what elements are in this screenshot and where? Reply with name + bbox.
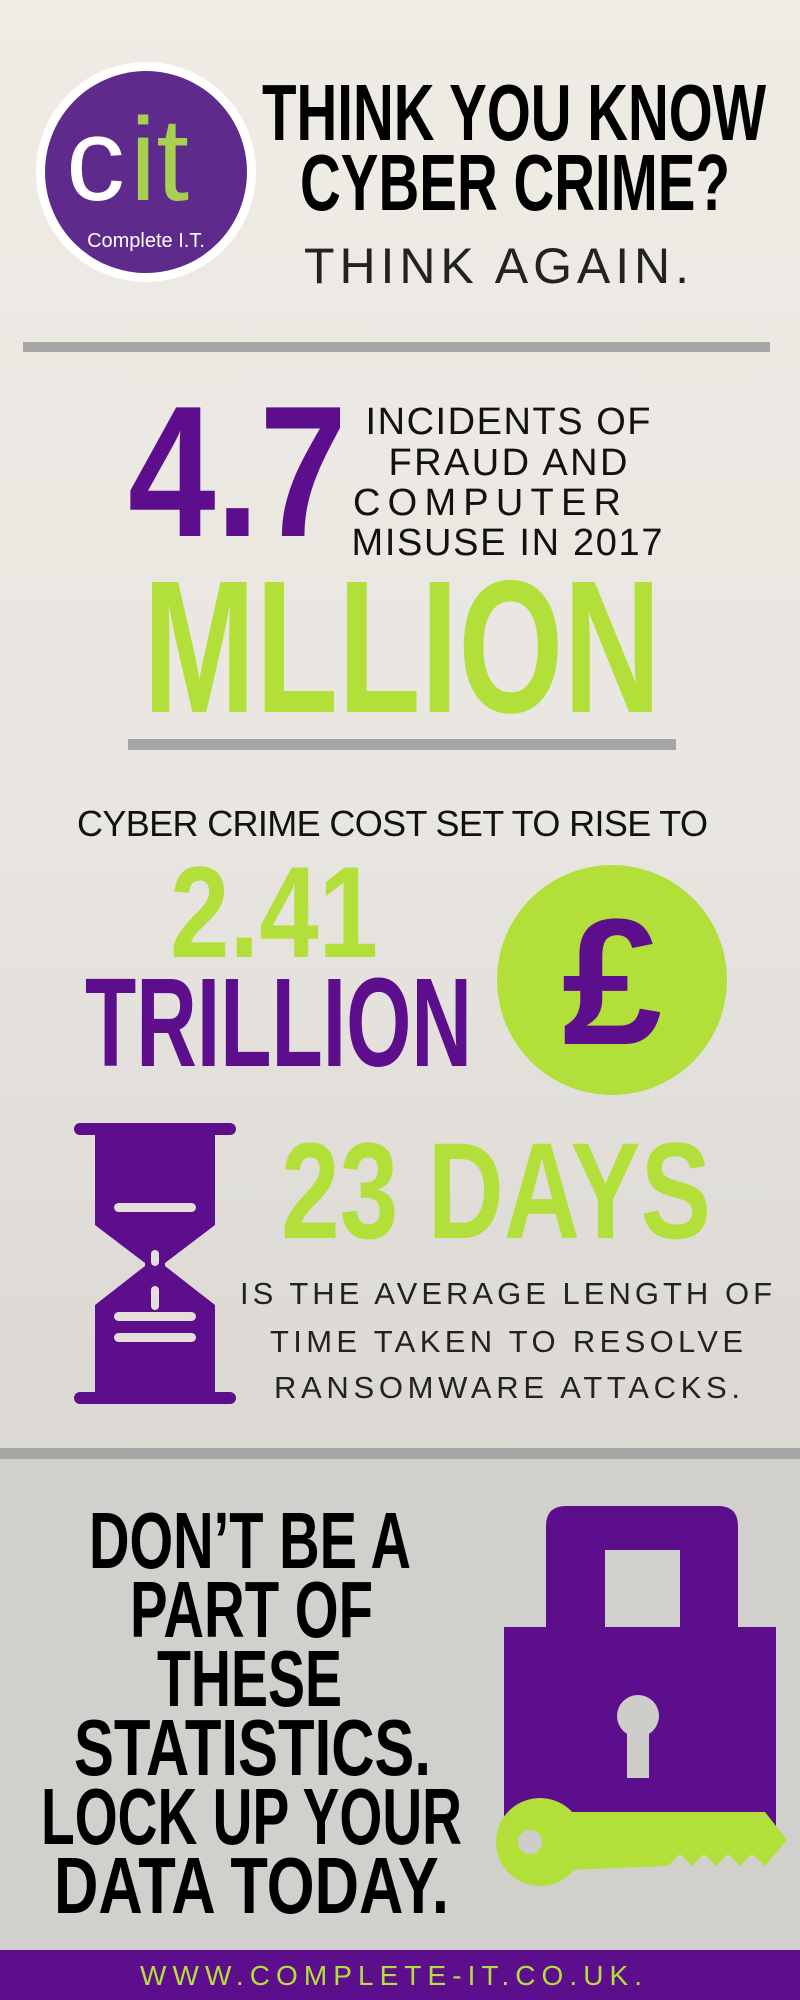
call to action: THESE	[157, 1634, 342, 1723]
footer	[0, 1950, 800, 2000]
icon: padlock	[504, 1506, 776, 1837]
stat: 4.7 million: COMPUTER	[353, 482, 621, 524]
stat: 4.7 million: FRAUD AND	[388, 442, 628, 484]
call to action	[41, 1496, 462, 1930]
logo	[36, 62, 256, 282]
subtitle: THINK AGAIN.	[304, 238, 689, 294]
stat: 4.7 million: INCIDENTS OF	[366, 401, 650, 443]
stat: 4.7 million: MISUSE IN 2017	[352, 522, 662, 564]
stat: 2.41 trillion: CYBER CRIME COST SET TO RISE TO	[77, 803, 708, 844]
call to action: PART OF	[130, 1565, 373, 1654]
stat: 4.7 million: 4.7	[128, 367, 347, 576]
stat: 2.41 trillion: 2.41	[170, 839, 378, 985]
stat: 23 days: IS THE AVERAGE LENGTH OF	[240, 1276, 772, 1311]
stat: 2.41 trillion	[77, 803, 708, 1093]
stat: 23 days: TIME TAKEN TO RESOLVE	[270, 1324, 743, 1359]
stat: 4.7 million	[128, 367, 662, 753]
stat: 2.41 trillion: TRILLION	[85, 952, 472, 1093]
logo: it	[130, 94, 189, 226]
stat: 23 days: RANSOMWARE ATTACKS.	[274, 1370, 740, 1405]
icon: hourglass	[74, 1123, 236, 1404]
stat: 23 days	[240, 1115, 772, 1405]
footer: WWW.COMPLETE-IT.CO.UK.	[140, 1960, 642, 1991]
icon: key	[496, 1798, 787, 1886]
logo: Complete I.T.	[87, 230, 205, 252]
logo: c	[66, 94, 125, 226]
call to action: STATISTICS.	[74, 1703, 431, 1792]
call to action: LOCK UP YOUR	[41, 1772, 462, 1861]
icon: pound coin	[497, 865, 727, 1095]
call to action: DON’T BE A	[89, 1496, 411, 1585]
call to action: DATA TODAY.	[54, 1841, 449, 1930]
title	[262, 68, 766, 227]
icon: pound coin: £	[562, 882, 662, 1083]
